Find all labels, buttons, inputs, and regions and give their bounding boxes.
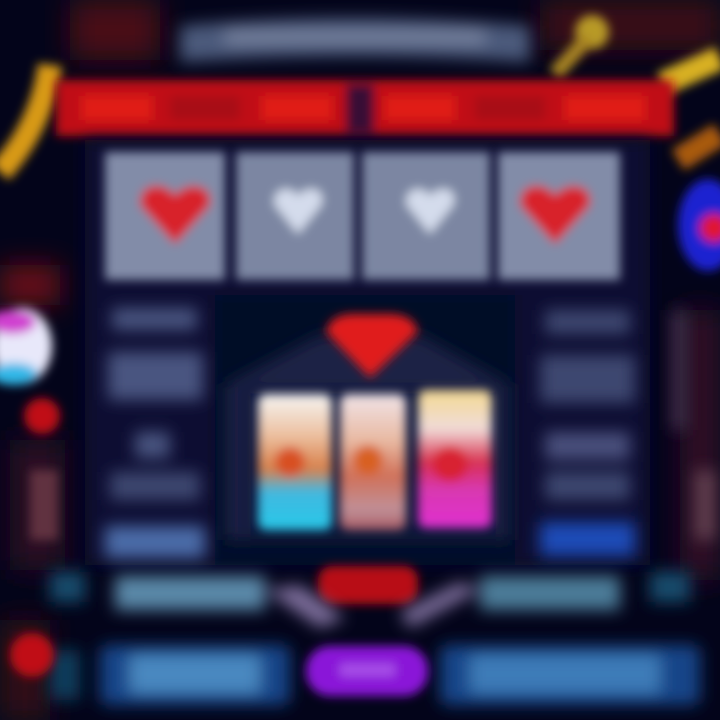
right side lights xyxy=(672,310,715,540)
reel 3 xyxy=(418,390,492,528)
gold decorations xyxy=(0,15,720,172)
reel 2 xyxy=(340,394,406,530)
payout tile 4 with red heart xyxy=(498,152,620,280)
bottom left control panel xyxy=(50,645,290,705)
center red heart xyxy=(326,314,418,378)
left pastel orb xyxy=(0,308,52,385)
right info column xyxy=(540,310,635,556)
bottom right control panel xyxy=(440,645,700,705)
left info column xyxy=(105,308,205,558)
reel frame xyxy=(225,335,510,540)
payout tile 1 with red heart xyxy=(105,152,225,280)
top silver banner xyxy=(180,18,530,62)
payout tile 2 with white heart xyxy=(236,152,354,280)
main panel xyxy=(85,140,650,565)
lower blue strips xyxy=(50,572,690,628)
lower red badge xyxy=(318,566,418,604)
left red lights xyxy=(10,398,60,677)
purple spin button xyxy=(306,646,428,696)
payout tile 3 with white heart xyxy=(362,152,490,280)
right blue orb xyxy=(678,179,720,271)
red title banner xyxy=(56,80,674,136)
reel 1 xyxy=(258,394,332,530)
